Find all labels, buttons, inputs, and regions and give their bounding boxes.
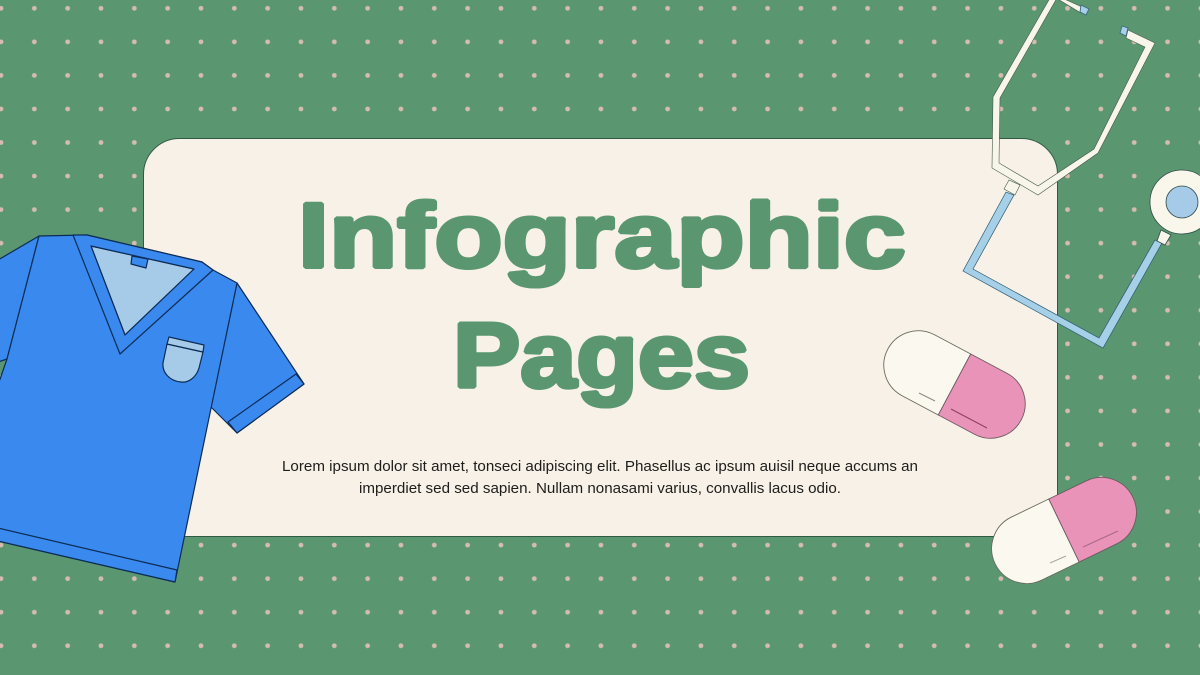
capsule bottom pink half (1049, 466, 1148, 562)
shirt right sleeve cuff (228, 374, 304, 433)
shirt left sleeve (0, 236, 39, 362)
shirt pocket (163, 337, 204, 382)
stethoscope chest piece (1150, 170, 1200, 245)
shirt body (0, 235, 237, 582)
stethoscope earpiece tips (1080, 5, 1128, 36)
shirt right sleeve (211, 283, 304, 433)
shirt collar (73, 235, 213, 354)
title: Infographic (298, 185, 906, 287)
title: Pages (453, 305, 750, 407)
stethoscope blue tube (963, 192, 1162, 348)
body text: imperdiet sed sed sapien. Nullam nonasami varius, convallis lacus odio. (359, 481, 841, 497)
stethoscope earpiece arm (1056, 0, 1082, 13)
icon: capsule top (872, 319, 1037, 450)
shirt neck opening (91, 246, 194, 335)
capsule bottom cream half (980, 499, 1079, 595)
icon: blue scrub shirt (0, 235, 304, 582)
title (298, 185, 906, 407)
stethoscope cream tube (992, 0, 1155, 195)
body text (282, 459, 918, 497)
capsule top cream half (872, 319, 971, 415)
icon: stethoscope (963, 0, 1200, 348)
capsule top highlights (919, 393, 987, 428)
shirt neck tag (131, 256, 148, 268)
panel: cream card (144, 138, 1058, 536)
stethoscope connector (1004, 180, 1020, 195)
capsule top pink half (938, 354, 1037, 450)
shirt hem (0, 528, 177, 582)
capsule bottom highlights (1050, 531, 1118, 563)
icon: capsule bottom (980, 466, 1148, 595)
body text: Lorem ipsum dolor sit amet, tonseci adipiscing elit. Phasellus ac ipsum auisil neque accums an (282, 459, 918, 475)
